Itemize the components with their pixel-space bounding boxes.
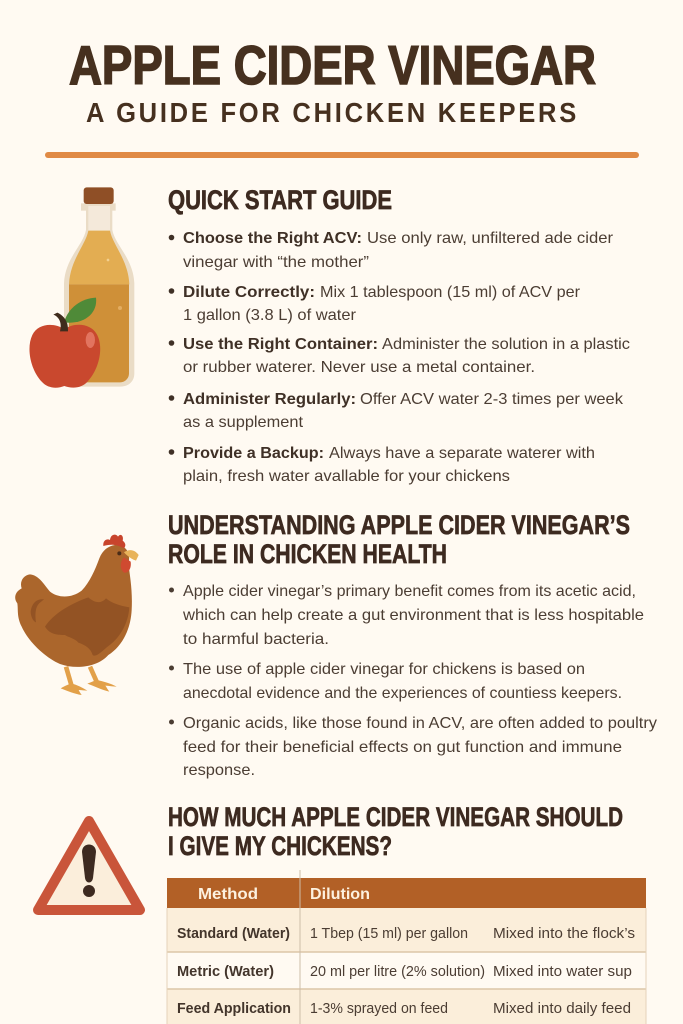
section heading: quick start guide: QUICK START GUIDE <box>168 185 392 215</box>
dosage table <box>167 870 646 1024</box>
bullet 4 <box>169 391 624 431</box>
bullet 5 <box>169 445 595 485</box>
bullet 4: Offer ACV water 2-3 times per week <box>360 391 624 408</box>
table header <box>167 878 646 908</box>
bullet: acetic acid: to harmful bacteria. <box>183 631 329 648</box>
row: feed: 1-3% sprayed on feed <box>310 1000 448 1017</box>
quick start list <box>169 230 630 485</box>
row: metric: Metric (Water) <box>177 963 274 980</box>
bullet 1: vinegar with “the mother” <box>183 254 369 271</box>
row: feed <box>177 1000 631 1017</box>
section heading: understanding acv <box>168 510 630 569</box>
icon: warning triangle <box>38 821 140 910</box>
bullet 2: Dilute Correctly: <box>183 284 315 301</box>
row: metric: 20 ml per litre (2% solution) <box>310 963 485 980</box>
row: metric: Mixed into water sup <box>493 963 632 980</box>
bullet 4: as a supplement <box>183 414 304 431</box>
bullet 3: or rubber waterer. Never use a metal container. <box>183 359 535 376</box>
title <box>69 34 596 128</box>
bullet: acetic acid: which can help create a gut environment that is less hospitable <box>182 607 644 624</box>
orange divider <box>45 152 639 158</box>
bullet: anecdotal evidence: anecdotal evidence and the experiences of countiess keepers. <box>183 685 622 702</box>
row: standard: Mixed into the flock’s <box>493 925 635 942</box>
bullet: organic acids: response. <box>183 762 255 779</box>
icon: vinegar bottle and apple <box>29 187 134 388</box>
bullet 1 <box>169 230 614 271</box>
bullet 1: Use only raw, unfiltered ade cider <box>367 230 614 247</box>
dosage table: Dilution <box>310 886 370 903</box>
bullet: anecdotal evidence: The use of apple cider vinegar for chickens is based on <box>183 661 585 678</box>
bullet 3 <box>169 336 630 376</box>
bullet: organic acids: Organic acids, like those found in ACV, are often added to poultry <box>183 715 657 732</box>
section heading: how much: I GIVE MY CHICKENS? <box>168 831 392 861</box>
bullet: organic acids <box>169 715 657 779</box>
bullet 5: Provide a Backup: <box>183 445 324 462</box>
bullet 2: Mix 1 tablespoon (15 ml) of ACV per <box>320 284 581 301</box>
subtitle: A GUIDE FOR CHICKEN KEEPERS <box>86 97 579 128</box>
section heading: understanding acv: ROLE IN CHICKEN HEALTH <box>168 539 447 569</box>
row: feed: Mixed into daily feed <box>493 1000 631 1017</box>
row: metric <box>177 963 632 980</box>
bullet: organic acids: feed for their beneficial effects on gut function and immune <box>183 739 622 756</box>
apple <box>29 298 100 388</box>
row: standard <box>177 925 635 942</box>
bullet 2: 1 gallon (3.8 L) of water <box>183 307 357 324</box>
bullet 5: plain, fresh water avallable for your chickens <box>183 468 510 485</box>
bullet 3: Administer the solution in a plastic <box>382 336 630 353</box>
bullet: acetic acid: Apple cider vinegar’s primary benefit comes from its acetic acid, <box>183 583 636 600</box>
row: standard: 1 Tbep (15 ml) per gallon <box>310 925 468 942</box>
bullet 2 <box>169 284 581 324</box>
row: feed: Feed Application <box>177 1000 291 1017</box>
icon: hen <box>15 535 139 695</box>
bullet 4: Administer Regularly: <box>183 391 356 408</box>
bullet 5: Always have a separate waterer with <box>329 445 595 462</box>
row: standard: Standard (Water) <box>177 925 290 942</box>
bullet: anecdotal evidence <box>169 661 622 702</box>
section heading: how much <box>168 802 623 861</box>
bullet 1: Choose the Right ACV: <box>183 230 362 247</box>
table rows <box>167 908 646 952</box>
bullet 3: Use the Right Container: <box>183 336 378 353</box>
bullet: acetic acid <box>169 583 644 648</box>
understanding acv list <box>169 583 657 779</box>
dosage table: Method <box>198 886 258 903</box>
